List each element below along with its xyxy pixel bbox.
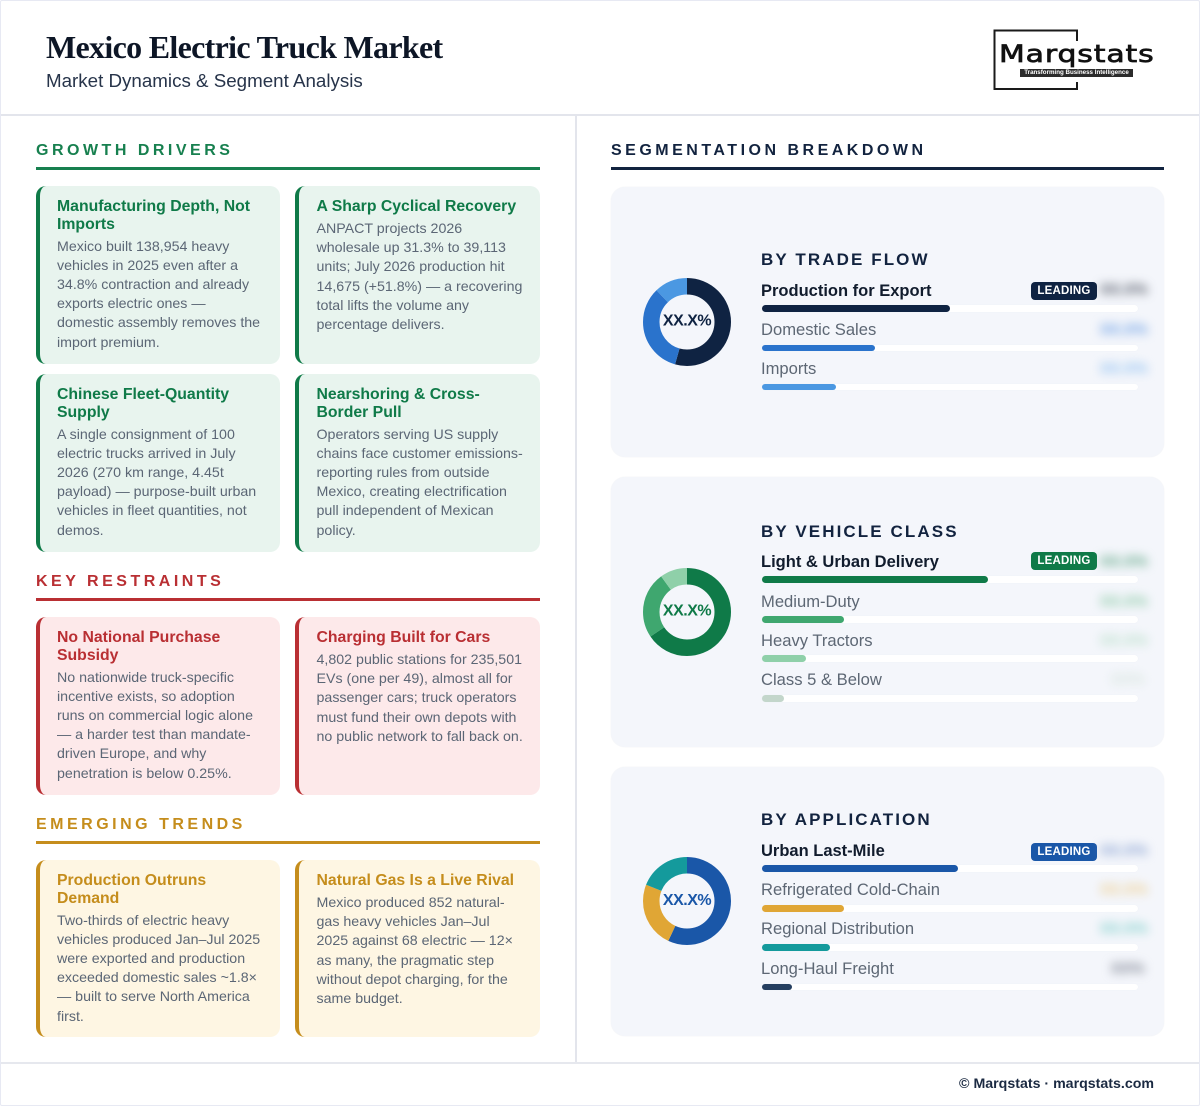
value: production for export: XX.X% (1100, 280, 1148, 298)
card: cyclical recovery: units; July 2026 production hit (316, 259, 505, 275)
row label: imports: Imports (761, 358, 816, 378)
card: nearshoring: reporting rules from outside (316, 465, 490, 481)
bar: imports (762, 384, 1138, 390)
card: production outruns demand (36, 860, 280, 1037)
card: production outruns demand: Two-thirds of electric heavy (57, 912, 229, 928)
card: production outruns demand: were exported and production (57, 951, 245, 967)
footer divider (1, 1062, 1199, 1064)
rule: key restraints (36, 598, 540, 601)
card: production outruns demand: Demand (57, 890, 119, 906)
card: chinese fleet supply: Supply (57, 404, 110, 420)
donut: trade flow: XX.X% (663, 312, 711, 330)
card: natural gas rival: Mexico produced 852 natural- (316, 895, 505, 911)
bar: class 5 and below (762, 695, 1138, 702)
value: urban last-mile: XX.X% (1100, 842, 1148, 858)
bar: production for export (762, 305, 1138, 312)
card: production outruns demand: first. (57, 1009, 84, 1025)
badge: leading: LEADING (1037, 555, 1091, 567)
row label: long-haul freight: Long-Haul Freight (761, 958, 894, 978)
card: nearshoring: Border Pull (316, 404, 402, 420)
badge: leading: LEADING (1037, 285, 1091, 297)
value: heavy tractors: XX.X% (1100, 632, 1148, 648)
card: manufacturing depth: Manufacturing Depth, Not (57, 198, 250, 215)
heading: emerging trends: EMERGING TRENDS (36, 816, 246, 832)
title: Mexico Electric Truck Market (46, 29, 443, 65)
card: production outruns demand: Production Outruns (57, 872, 206, 889)
bar: domestic sales (762, 344, 1138, 351)
value: light and urban delivery: XX.X% (1100, 552, 1148, 570)
badge: leading (1031, 282, 1097, 300)
card: charging built for cars: passenger cars; truck operators (316, 690, 516, 706)
card: chinese fleet supply: Chinese Fleet-Quantity (57, 386, 229, 403)
card: nearshoring: pull independent of Mexican (316, 503, 494, 519)
column divider (575, 115, 576, 1063)
card: manufacturing depth: vehicles in 2025 even after a (57, 258, 238, 274)
panel: by application (611, 767, 1164, 1036)
card: chinese fleet supply (36, 374, 280, 552)
logo (994, 30, 1155, 90)
card: no purchase subsidy: — a harder test than mandate- (57, 727, 251, 743)
card: natural gas rival: without depot charging, for the (316, 972, 508, 988)
donut: application: XX.X% (663, 892, 711, 909)
logo: Marqstats (999, 40, 1155, 68)
card: no purchase subsidy: penetration is below 0.25%. (57, 766, 232, 782)
badge: leading: LEADING (1037, 846, 1091, 858)
card: manufacturing depth: domestic assembly removes the (57, 315, 260, 331)
badge: leading (1031, 843, 1097, 861)
row label: regional distribution: Regional Distribution (761, 918, 914, 938)
card: charging built for cars: EVs (one per 49), almost all for (316, 671, 512, 687)
card: manufacturing depth (36, 186, 280, 364)
bar: heavy tractors (762, 655, 1138, 662)
heading: by vehicle class: BY VEHICLE CLASS (761, 522, 959, 541)
bar: long-haul freight (762, 984, 1138, 990)
bar: light and urban delivery (762, 576, 1138, 582)
row label: urban last-mile: Urban Last-Mile (761, 842, 885, 860)
card: manufacturing depth: import premium. (57, 335, 160, 351)
card: nearshoring: Operators serving US supply (316, 426, 498, 442)
rule: growth drivers (36, 167, 540, 170)
card: chinese fleet supply: electric trucks arrived in July (57, 446, 236, 462)
card: charging built for cars: Charging Built for Cars (316, 629, 490, 646)
card: natural gas rival (295, 860, 540, 1037)
card: chinese fleet supply: vehicles in fleet quantities, not (57, 503, 247, 519)
card: no purchase subsidy: No nationwide truck-specific (57, 670, 234, 686)
value: domestic sales: XX.X% (1100, 320, 1148, 338)
bar: medium-duty (762, 616, 1138, 622)
panel: by vehicle class (611, 477, 1164, 747)
card: no purchase subsidy: No National Purchase (57, 629, 220, 646)
value: refrigerated cold-chain: XX.X% (1100, 880, 1148, 898)
card: no purchase subsidy: runs on commercial logic alone (57, 708, 253, 724)
value: long-haul freight: XX% (1111, 960, 1144, 976)
row label: domestic sales: Domestic Sales (761, 320, 876, 338)
rule: segmentation breakdown (611, 167, 1164, 170)
card: cyclical recovery (295, 186, 540, 364)
heading: by application: BY APPLICATION (761, 810, 932, 829)
card: cyclical recovery: 14,675 (+51.8%) — a recovering (316, 279, 522, 295)
card: manufacturing depth: 34.8% contraction and already (57, 277, 249, 293)
row label: medium-duty: Medium-Duty (761, 592, 860, 610)
bar: urban last-mile (762, 865, 1138, 872)
card: natural gas rival: gas heavy vehicles Jan–Jul (316, 914, 490, 930)
panel: by trade flow (611, 187, 1164, 457)
card: chinese fleet supply: payload) — purpose-built urban (57, 484, 256, 500)
card: charging built for cars: 4,802 public stations for 235,501 (316, 652, 522, 668)
card: no purchase subsidy (36, 617, 280, 795)
card: no purchase subsidy: Subsidy (57, 646, 118, 664)
row label: refrigerated cold-chain: Refrigerated Cold-Chain (761, 880, 940, 898)
card: cyclical recovery: A Sharp Cyclical Recovery (316, 198, 516, 215)
heading: by trade flow: BY TRADE FLOW (761, 250, 930, 269)
card: production outruns demand: — built to serve North America (57, 989, 250, 1005)
card: chinese fleet supply: demos. (57, 523, 104, 539)
value: imports: XX.X% (1100, 360, 1148, 376)
card: nearshoring: Mexico, creating electrification (316, 484, 507, 500)
donut: application (643, 857, 731, 945)
card: manufacturing depth: exports electric ones — (57, 296, 206, 312)
card: natural gas rival: same budget. (316, 991, 403, 1007)
value: medium-duty: XX.X% (1100, 592, 1148, 610)
card: cyclical recovery: ANPACT projects 2026 (316, 221, 462, 237)
card: natural gas rival: 2025 against 68 electric — 12× (316, 933, 513, 949)
row label: class 5 and below: Class 5 & Below (761, 670, 882, 688)
heading: segmentation breakdown: SEGMENTATION BREAKDOWN (611, 142, 927, 158)
card: charging built for cars: must fund their own depots with (316, 710, 516, 726)
heading: growth drivers: GROWTH DRIVERS (36, 142, 233, 158)
card: natural gas rival: as many, the pragmatic step (316, 953, 494, 969)
card: cyclical recovery: total lifts the volume any (316, 298, 469, 314)
donut: vehicle class (643, 568, 731, 656)
card: natural gas rival: Natural Gas Is a Live Rival (316, 872, 514, 889)
footer: copyright: © Marqstats · marqstats.com (959, 1076, 1154, 1092)
row label: light and urban delivery: Light & Urban Delivery (761, 552, 939, 570)
card: manufacturing depth: Mexico built 138,954 heavy (57, 238, 229, 254)
header divider (1, 114, 1199, 116)
card: cyclical recovery: percentage delivers. (316, 317, 445, 333)
value: regional distribution: XX.X% (1100, 920, 1148, 936)
card: nearshoring (295, 374, 540, 552)
card: manufacturing depth: Imports (57, 216, 115, 232)
bar: refrigerated cold-chain (762, 905, 1138, 912)
card: cyclical recovery: wholesale up 31.3% to 39,113 (316, 240, 506, 256)
row label: production for export: Production for Export (761, 282, 932, 300)
card: no purchase subsidy: incentive exists, so adoption (57, 689, 235, 705)
card: charging built for cars (295, 617, 540, 795)
card: chinese fleet supply: A single consignment of 100 (57, 426, 235, 442)
badge: leading (1031, 552, 1097, 570)
value: class 5 and below: XX% (1111, 670, 1144, 688)
heading: key restraints: KEY RESTRAINTS (36, 572, 224, 590)
subtitle: Market Dynamics & Segment Analysis (46, 70, 363, 91)
card: nearshoring: chains face customer emissions- (316, 446, 523, 462)
card: no purchase subsidy: driven Europe, and why (57, 746, 206, 762)
logo: Transforming Business Intelligence (1024, 69, 1129, 76)
row label: heavy tractors: Heavy Tractors (761, 630, 873, 650)
rule: emerging trends (36, 841, 540, 844)
bar: regional distribution (762, 944, 1138, 950)
donut: trade flow (643, 278, 731, 366)
card: chinese fleet supply: 2026 (270 km range, 4.45t (57, 465, 224, 481)
card: nearshoring: Nearshoring & Cross- (316, 386, 480, 403)
card: production outruns demand: vehicles produced Jan–Jul 2025 (57, 932, 260, 948)
card: production outruns demand: exceeded domestic sales ~1.8× (57, 970, 257, 986)
donut: vehicle class: XX.X% (663, 602, 711, 620)
card: nearshoring: policy. (316, 523, 356, 539)
card: charging built for cars: no public network to fall back on. (316, 729, 523, 745)
